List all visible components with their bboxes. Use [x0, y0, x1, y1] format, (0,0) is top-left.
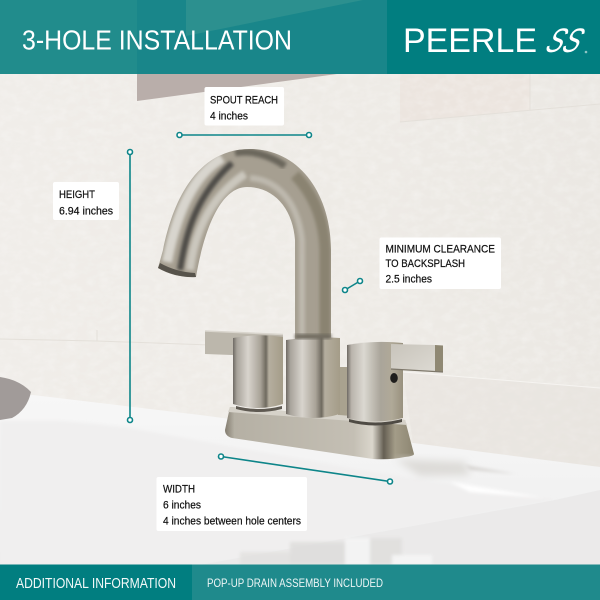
wall texture [0, 74, 600, 474]
footer heading: ADDITIONAL INFORMATION [16, 576, 176, 592]
dimension line: height [128, 150, 132, 422]
faucet [150, 140, 443, 459]
spout [158, 149, 331, 339]
label: minimum clearance: TO BACKSPLASH [386, 258, 465, 270]
label: height: HEIGHT [59, 189, 95, 201]
title: 3-HOLE INSTALLATION [22, 24, 292, 56]
spout outlet [158, 263, 196, 277]
gray towel [0, 377, 31, 420]
footer text: POP-UP DRAIN ASSEMBLY INCLUDED [207, 578, 383, 590]
label: minimum clearance: 2.5 inches [386, 274, 432, 286]
neck collar shadow [295, 334, 331, 339]
right lever [391, 344, 435, 371]
background: sink basin [0, 395, 600, 565]
label: minimum clearance [380, 238, 501, 289]
footer band [0, 564, 600, 600]
header band [0, 0, 600, 74]
right cylinder [347, 342, 403, 422]
right cylinder base ring [349, 419, 402, 426]
label: spout reach: SPOUT REACH [210, 94, 278, 106]
mounting plate [225, 407, 414, 459]
center cylinder [286, 337, 340, 418]
left cylinder base ring [236, 406, 282, 412]
sink highlight [450, 482, 545, 498]
wall shelf [137, 74, 337, 101]
label: spout reach [204, 87, 284, 126]
upper wall tile [400, 74, 530, 122]
label: spout reach: 4 inches [210, 110, 248, 122]
label: height: 6.94 inches [59, 206, 113, 218]
label: width [156, 477, 307, 531]
sink reflection [240, 538, 432, 565]
faucet shadow [395, 459, 470, 476]
dimension line: clearance [342, 278, 362, 292]
wall tile joints [0, 74, 600, 388]
back post [338, 367, 349, 422]
dimension line: width [218, 454, 392, 484]
left cylinder [233, 335, 283, 408]
logo: Peerless [403, 21, 592, 60]
left lever [205, 331, 283, 357]
label: minimum clearance: MINIMUM CLEARANCE [386, 244, 495, 256]
lower wall band [403, 372, 600, 467]
label: width: 6 inches [163, 500, 201, 512]
label: width: WIDTH [163, 484, 195, 496]
label: width: 4 inches between hole centers [163, 516, 301, 528]
dimension line: spout reach [177, 132, 312, 138]
logo: Peerless: PEERLE [403, 22, 537, 60]
label: height [53, 182, 119, 220]
handle set hole [390, 373, 398, 383]
